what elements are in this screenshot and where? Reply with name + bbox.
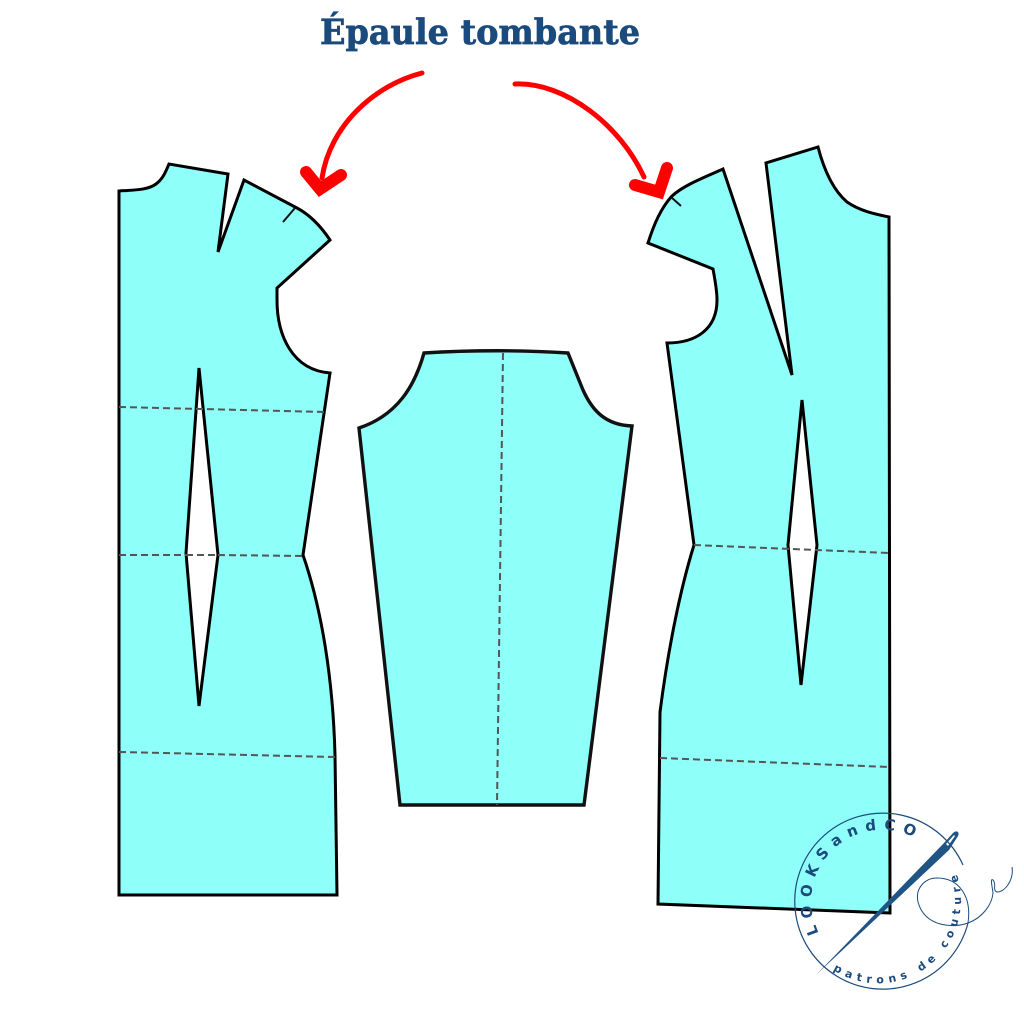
needle: [816, 831, 959, 975]
arrow: right red arrow: [515, 84, 667, 192]
brand name: LOOKSandCO: [800, 818, 916, 936]
arrow: left red arrow: [306, 73, 422, 189]
panel: right bodice pattern: [648, 147, 890, 913]
sleeve outline: [359, 351, 632, 805]
dashed guide lines: [660, 545, 889, 767]
right bodice outline: [648, 147, 890, 913]
left bodice outline: [119, 164, 337, 895]
logo circle: [795, 813, 968, 989]
sleeve centre dashed line: [497, 353, 503, 805]
panel: left bodice pattern: [119, 164, 337, 895]
panel: sleeve pattern: [359, 351, 632, 805]
tagline: patrons de couture: [832, 875, 962, 984]
shoulder notch: [283, 208, 295, 222]
thread loop: [917, 867, 1012, 926]
title: Épaule tombante: [320, 11, 640, 53]
dashed guide lines: [119, 407, 335, 757]
logo: LOOKSandCO stamp: [794, 812, 1013, 990]
shoulder notch: [671, 197, 681, 206]
